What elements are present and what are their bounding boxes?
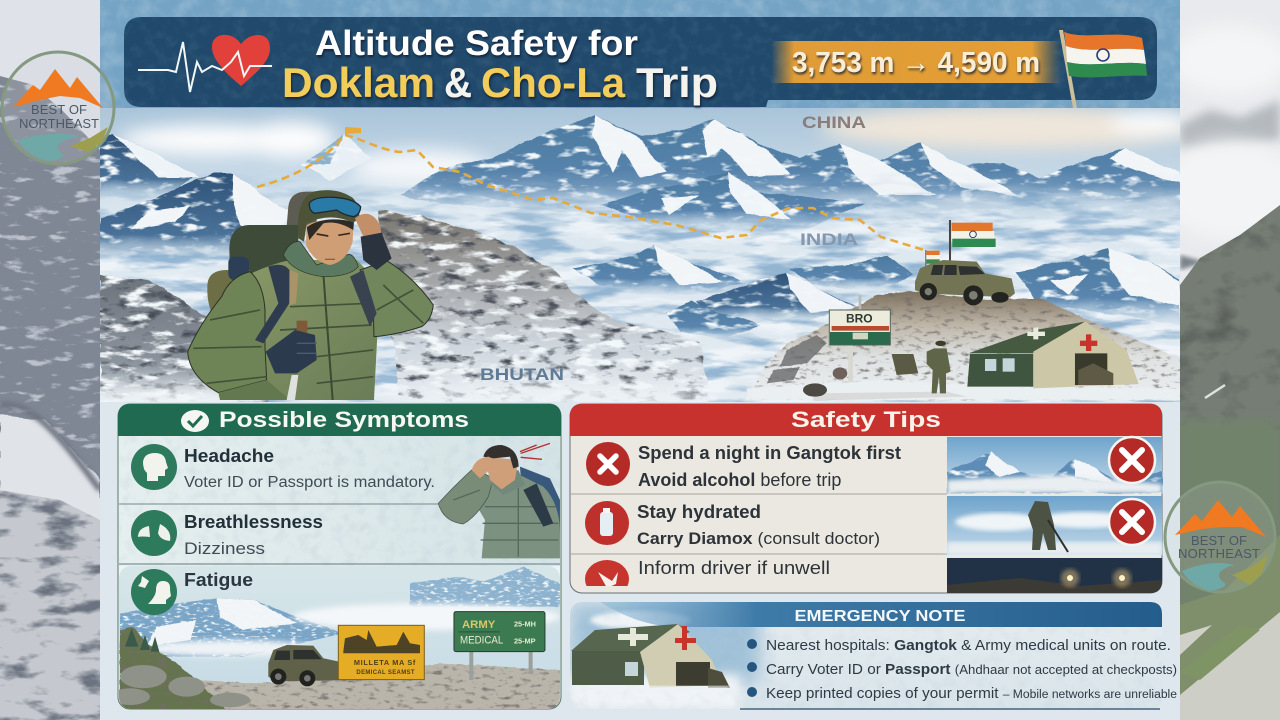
large flag on jeep	[949, 220, 996, 262]
army medical sign: 25-MH	[514, 620, 536, 629]
symptoms heading bar: Possible Symptoms	[219, 407, 469, 432]
panel: safety tips	[570, 404, 1162, 598]
symptoms heading bar	[118, 404, 561, 436]
army medical sign	[454, 612, 545, 680]
icon: water bottle	[585, 501, 629, 545]
soldier	[927, 341, 951, 393]
medical tent	[967, 322, 1139, 388]
army medical sign: ARMY	[462, 619, 496, 631]
rocky ridge	[377, 212, 710, 402]
symptom row: fatigue	[131, 569, 253, 615]
tip row: inform driver	[585, 560, 829, 586]
yellow sign: MILLETA MA Sf	[354, 658, 416, 667]
army medical sign: 25-MP	[514, 636, 536, 645]
BRO sign: BRO	[846, 312, 873, 326]
left mountains	[100, 133, 372, 262]
picture: night headlights	[947, 558, 1162, 593]
tip row: Gangtok and alcohol	[586, 442, 901, 490]
picture: snowy mountains	[947, 437, 1162, 493]
close badges	[1109, 437, 1155, 545]
logo: Best of Northeast left: BEST OF	[31, 102, 87, 117]
low peaks	[572, 245, 1180, 340]
icon: steering hand	[585, 560, 629, 586]
yellow sign	[338, 625, 424, 680]
army medical sign: MEDICAL	[460, 634, 503, 646]
tip row: hydration and Diamox: Carry Diamox (consult doctor)	[637, 529, 880, 548]
route line	[257, 127, 924, 250]
tip row: inform driver: Inform driver if unwell	[638, 558, 830, 578]
tip row: hydration and Diamox	[585, 501, 880, 548]
region labels	[480, 114, 866, 384]
bullet line 2: Carry Voter ID or Passport (Ahdhaar not accepted at checkposts)	[766, 662, 1177, 678]
icon: lungs	[131, 510, 177, 556]
safety tips heading bar	[570, 404, 1162, 436]
altitude badge: 3,753 m → 4,590 m	[792, 47, 1040, 79]
logo: Best of Northeast right	[1165, 482, 1275, 592]
logo: Best of Northeast right: BEST OF	[1191, 533, 1247, 548]
icon: head	[131, 444, 177, 490]
left background photo	[0, 0, 100, 720]
altitude badge	[771, 41, 1061, 83]
logo: Best of Northeast left: NORTHEAST	[19, 116, 99, 131]
small flag	[925, 250, 940, 272]
symptom row: headache: Headache	[184, 446, 274, 466]
symptom row: breathlessness: Breathlessness	[184, 512, 323, 532]
logo: Best of Northeast right: NORTHEAST	[1178, 546, 1260, 561]
army jeep	[915, 260, 1015, 305]
tip row: Gangtok and alcohol: Spend a night in Gangtok first	[638, 442, 901, 463]
far mountain range	[400, 115, 1180, 224]
symptom row: breathlessness	[131, 510, 323, 558]
label: Bhutan: BHUTAN	[480, 366, 564, 384]
icon: cross	[586, 442, 630, 486]
hilltop vehicle, flags, sign, tent	[829, 220, 1139, 393]
picture: lone trekker	[947, 496, 1162, 555]
title line 2: Trip	[636, 59, 718, 106]
flag of India	[1059, 30, 1147, 108]
title line 2	[282, 59, 718, 106]
scene: road with signs	[110, 564, 560, 710]
hiker with headache	[188, 190, 433, 400]
supply bags	[892, 354, 918, 375]
warm sky and cumulus	[120, 106, 1200, 186]
illustration: field hospital tent	[570, 624, 730, 691]
title line 2: Doklam	[282, 59, 435, 106]
yellow sign: DEMICAL SEAMST	[356, 670, 415, 676]
BRO sign	[829, 295, 890, 382]
label: India: INDIA	[800, 231, 858, 249]
tip row: hydration and Diamox: Stay hydrated	[637, 502, 761, 522]
bullet line 3: Keep printed copies of your permit – Mobile networks are unreliable	[766, 686, 1177, 702]
emergency list	[747, 638, 1177, 702]
bullet line 1: Nearest hospitals: Gangtok & Army medical units on route.	[766, 638, 1171, 654]
icon: check badge	[181, 410, 209, 432]
label: China: CHINA	[802, 114, 866, 132]
tip row: Gangtok and alcohol: Avoid alcohol before trip	[638, 470, 841, 490]
title line 2: &	[444, 59, 472, 106]
right background photo	[1180, 0, 1280, 720]
panel: possible symptoms	[110, 404, 561, 710]
middle peak	[600, 172, 865, 232]
cloud sea	[100, 170, 1180, 402]
lower snow haze	[70, 386, 720, 414]
title line 2: Cho-La	[481, 59, 626, 106]
header banner	[124, 17, 1157, 108]
mountain scene background	[70, 106, 1200, 414]
symptom row: fatigue: Fatigue	[184, 570, 253, 590]
icon: heart with ECG line	[138, 35, 272, 92]
symptom row: breathlessness: Dizziness	[184, 539, 265, 558]
hilltop foreground	[747, 292, 1180, 401]
title line 1: Altitude Safety for	[315, 24, 638, 63]
emergency heading: EMERGENCY NOTE	[794, 608, 966, 625]
panel: emergency note	[570, 602, 1177, 709]
symptom row: headache: Voter ID or Passport is mandatory.	[184, 474, 435, 491]
safety tips heading bar: Safety Tips	[791, 407, 941, 432]
logo: Best of Northeast left	[2, 52, 114, 164]
symptom row: headache	[131, 444, 435, 491]
olive SUV	[268, 645, 340, 686]
left foreground rock	[100, 275, 270, 402]
illustration: man holding head	[438, 443, 560, 558]
icon: dizzy head	[131, 569, 177, 615]
